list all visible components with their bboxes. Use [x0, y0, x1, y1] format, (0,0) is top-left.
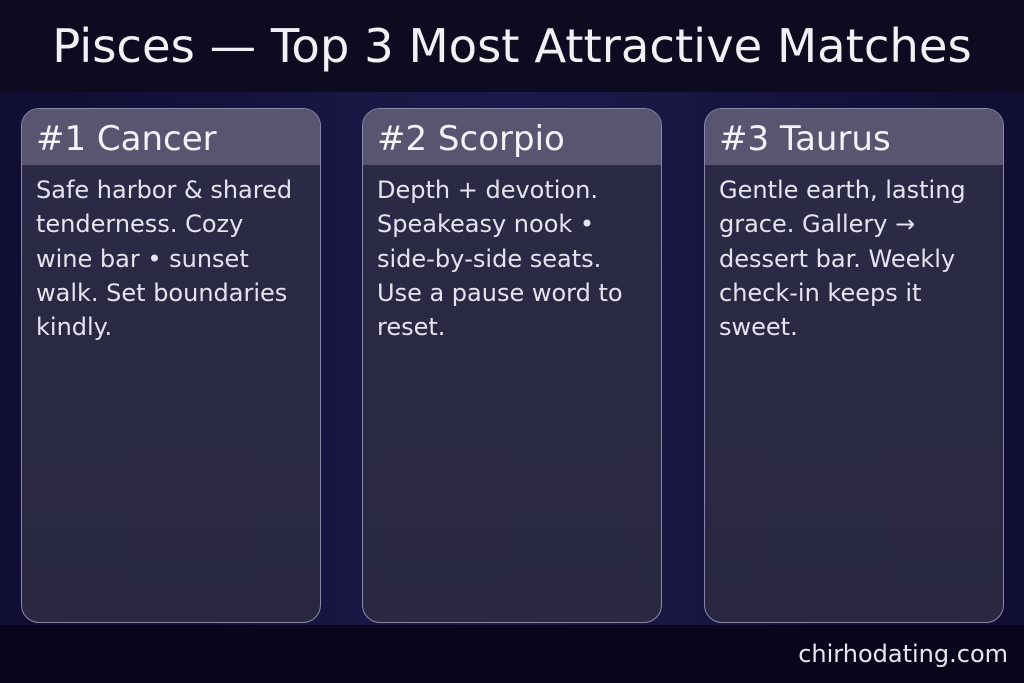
- text: Taurus: Gentle earth, lasting grace. Gallery → dessert bar. Weekly check‑in keeps it sweet.: [719, 176, 966, 341]
- heading: Cancer: [22, 109, 320, 165]
- text: Cancer: Safe harbor & shared tenderness. Cozy wine bar • sunset walk. Set boundaries kindly.: [36, 176, 292, 341]
- heading: Cancer: #1 Cancer: [36, 119, 217, 159]
- panel: Scorpio: [362, 108, 662, 623]
- panel: Cancer: [21, 108, 321, 623]
- title: [0, 0, 1024, 92]
- panel: Taurus: [704, 108, 1004, 623]
- title: Pisces — Top 3 Most Attractive Matches: [52, 19, 972, 73]
- heading: Taurus: #3 Taurus: [719, 119, 891, 159]
- heading: Scorpio: [363, 109, 661, 165]
- heading: Scorpio: #2 Scorpio: [377, 119, 565, 159]
- text: Scorpio: Depth + devotion. Speakeasy nook • side‑by‑side seats. Use a pause word to reset.: [377, 176, 623, 341]
- background band: [0, 92, 1024, 625]
- heading: Taurus: [705, 109, 1003, 165]
- footer credit: chirhodating.com: [798, 640, 1008, 668]
